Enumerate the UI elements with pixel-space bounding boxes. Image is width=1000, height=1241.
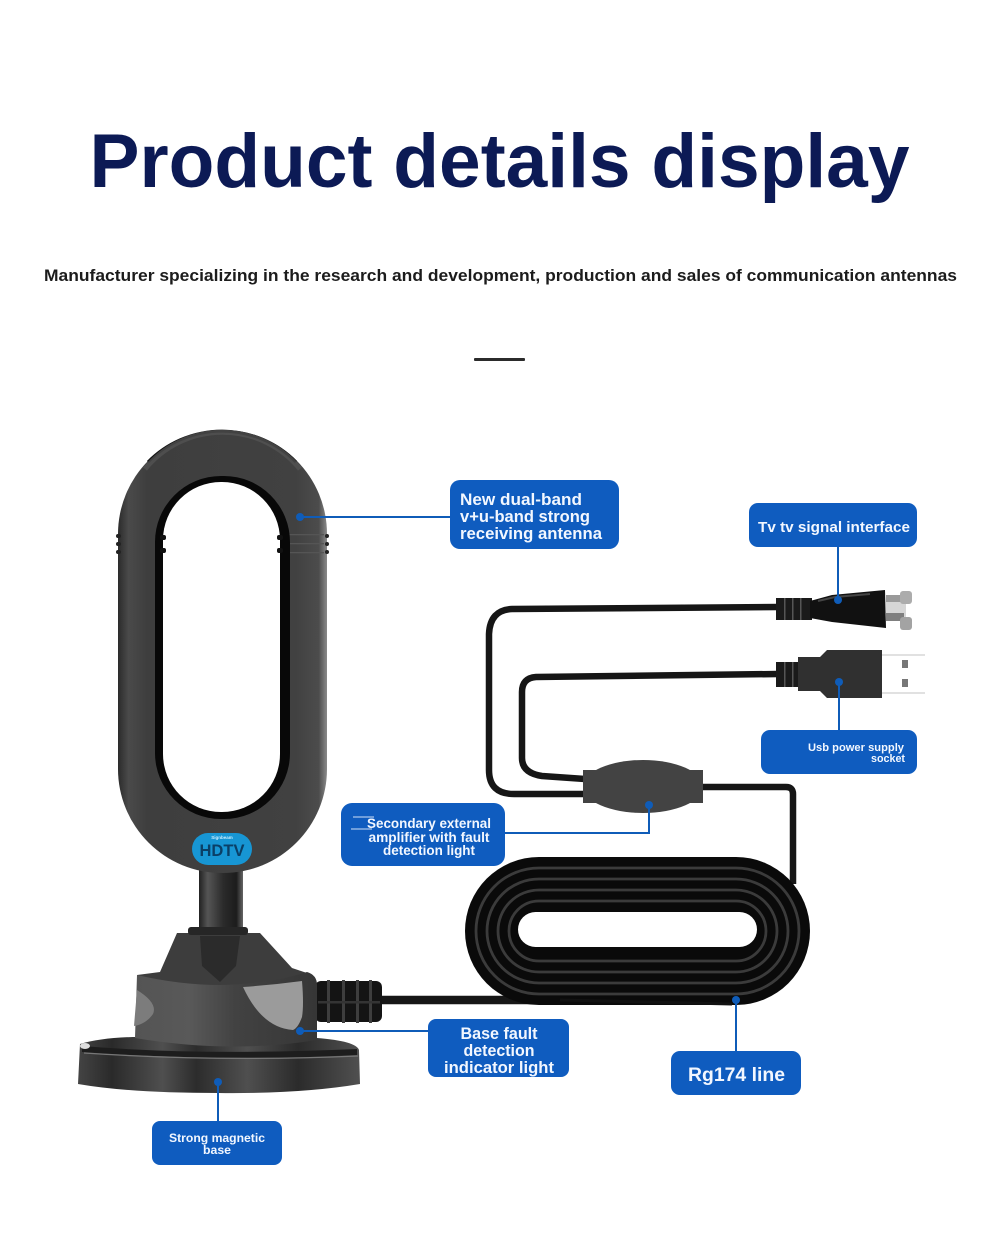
leader line: [503, 805, 649, 833]
amplifier module: [583, 760, 703, 813]
subtitle: Manufacturer specializing in the research and development, production and sales of communication antennas: [44, 266, 957, 285]
callout: antenna: [296, 480, 619, 549]
leader line: [300, 516, 452, 518]
callout: RG174 line: [671, 996, 801, 1095]
callout: antenna: receiving antenna: [460, 524, 603, 543]
callout: amplifier: [341, 801, 653, 866]
HDTV badge: Signbeam: [211, 835, 233, 840]
leader line: [217, 1082, 219, 1123]
leader line: [735, 1000, 737, 1053]
strain relief: [315, 980, 382, 1023]
TV F connector: [776, 590, 912, 630]
light window left: [134, 990, 154, 1026]
callout: antenna: v+u-band strong: [460, 507, 590, 526]
callout: amplifier: detection light: [383, 843, 475, 858]
cone: [137, 933, 307, 990]
callout: USB power: [761, 678, 917, 774]
callout: USB power: Usb power supply: [808, 742, 905, 754]
stem: [199, 865, 243, 931]
callout: magnetic base: base: [203, 1143, 231, 1157]
callout: antenna: New dual-band: [460, 490, 582, 509]
leader line: [838, 682, 840, 732]
antenna base: [78, 865, 382, 1093]
cables between connectors and amplifier: [380, 607, 793, 1000]
HDTV badge: HDTV: [200, 841, 245, 860]
USB plug: [776, 650, 925, 698]
callout: magnetic base: [152, 1078, 282, 1165]
title: Product details display: [90, 119, 910, 204]
callout: base indicator: [296, 1019, 569, 1077]
leader line: [837, 545, 839, 600]
callout: amplifier: Secondary external: [367, 816, 491, 831]
callout: amplifier: amplifier with fault: [368, 830, 490, 845]
callout: USB power: socket: [871, 753, 905, 765]
collar: [188, 927, 248, 935]
callout: TV signal interface: [749, 503, 917, 604]
grip ribs: [116, 534, 329, 554]
callout: base indicator: Base fault: [460, 1025, 538, 1043]
drum: [135, 972, 317, 1047]
antenna loop: [116, 430, 329, 873]
cable coil: [465, 857, 810, 1005]
callout: TV signal interface: Tv tv signal interface: [758, 519, 910, 536]
callout: base indicator: indicator light: [444, 1059, 554, 1077]
callout: magnetic base: Strong magnetic: [169, 1131, 265, 1145]
callout: base indicator: detection: [464, 1042, 534, 1060]
short divider: [474, 358, 525, 361]
magnetic disc: [78, 1037, 360, 1093]
HDTV badge: [192, 833, 252, 865]
light window right: [243, 981, 303, 1030]
leader line: [300, 1030, 430, 1032]
callout: RG174 line: Rg174 line: [688, 1065, 785, 1086]
